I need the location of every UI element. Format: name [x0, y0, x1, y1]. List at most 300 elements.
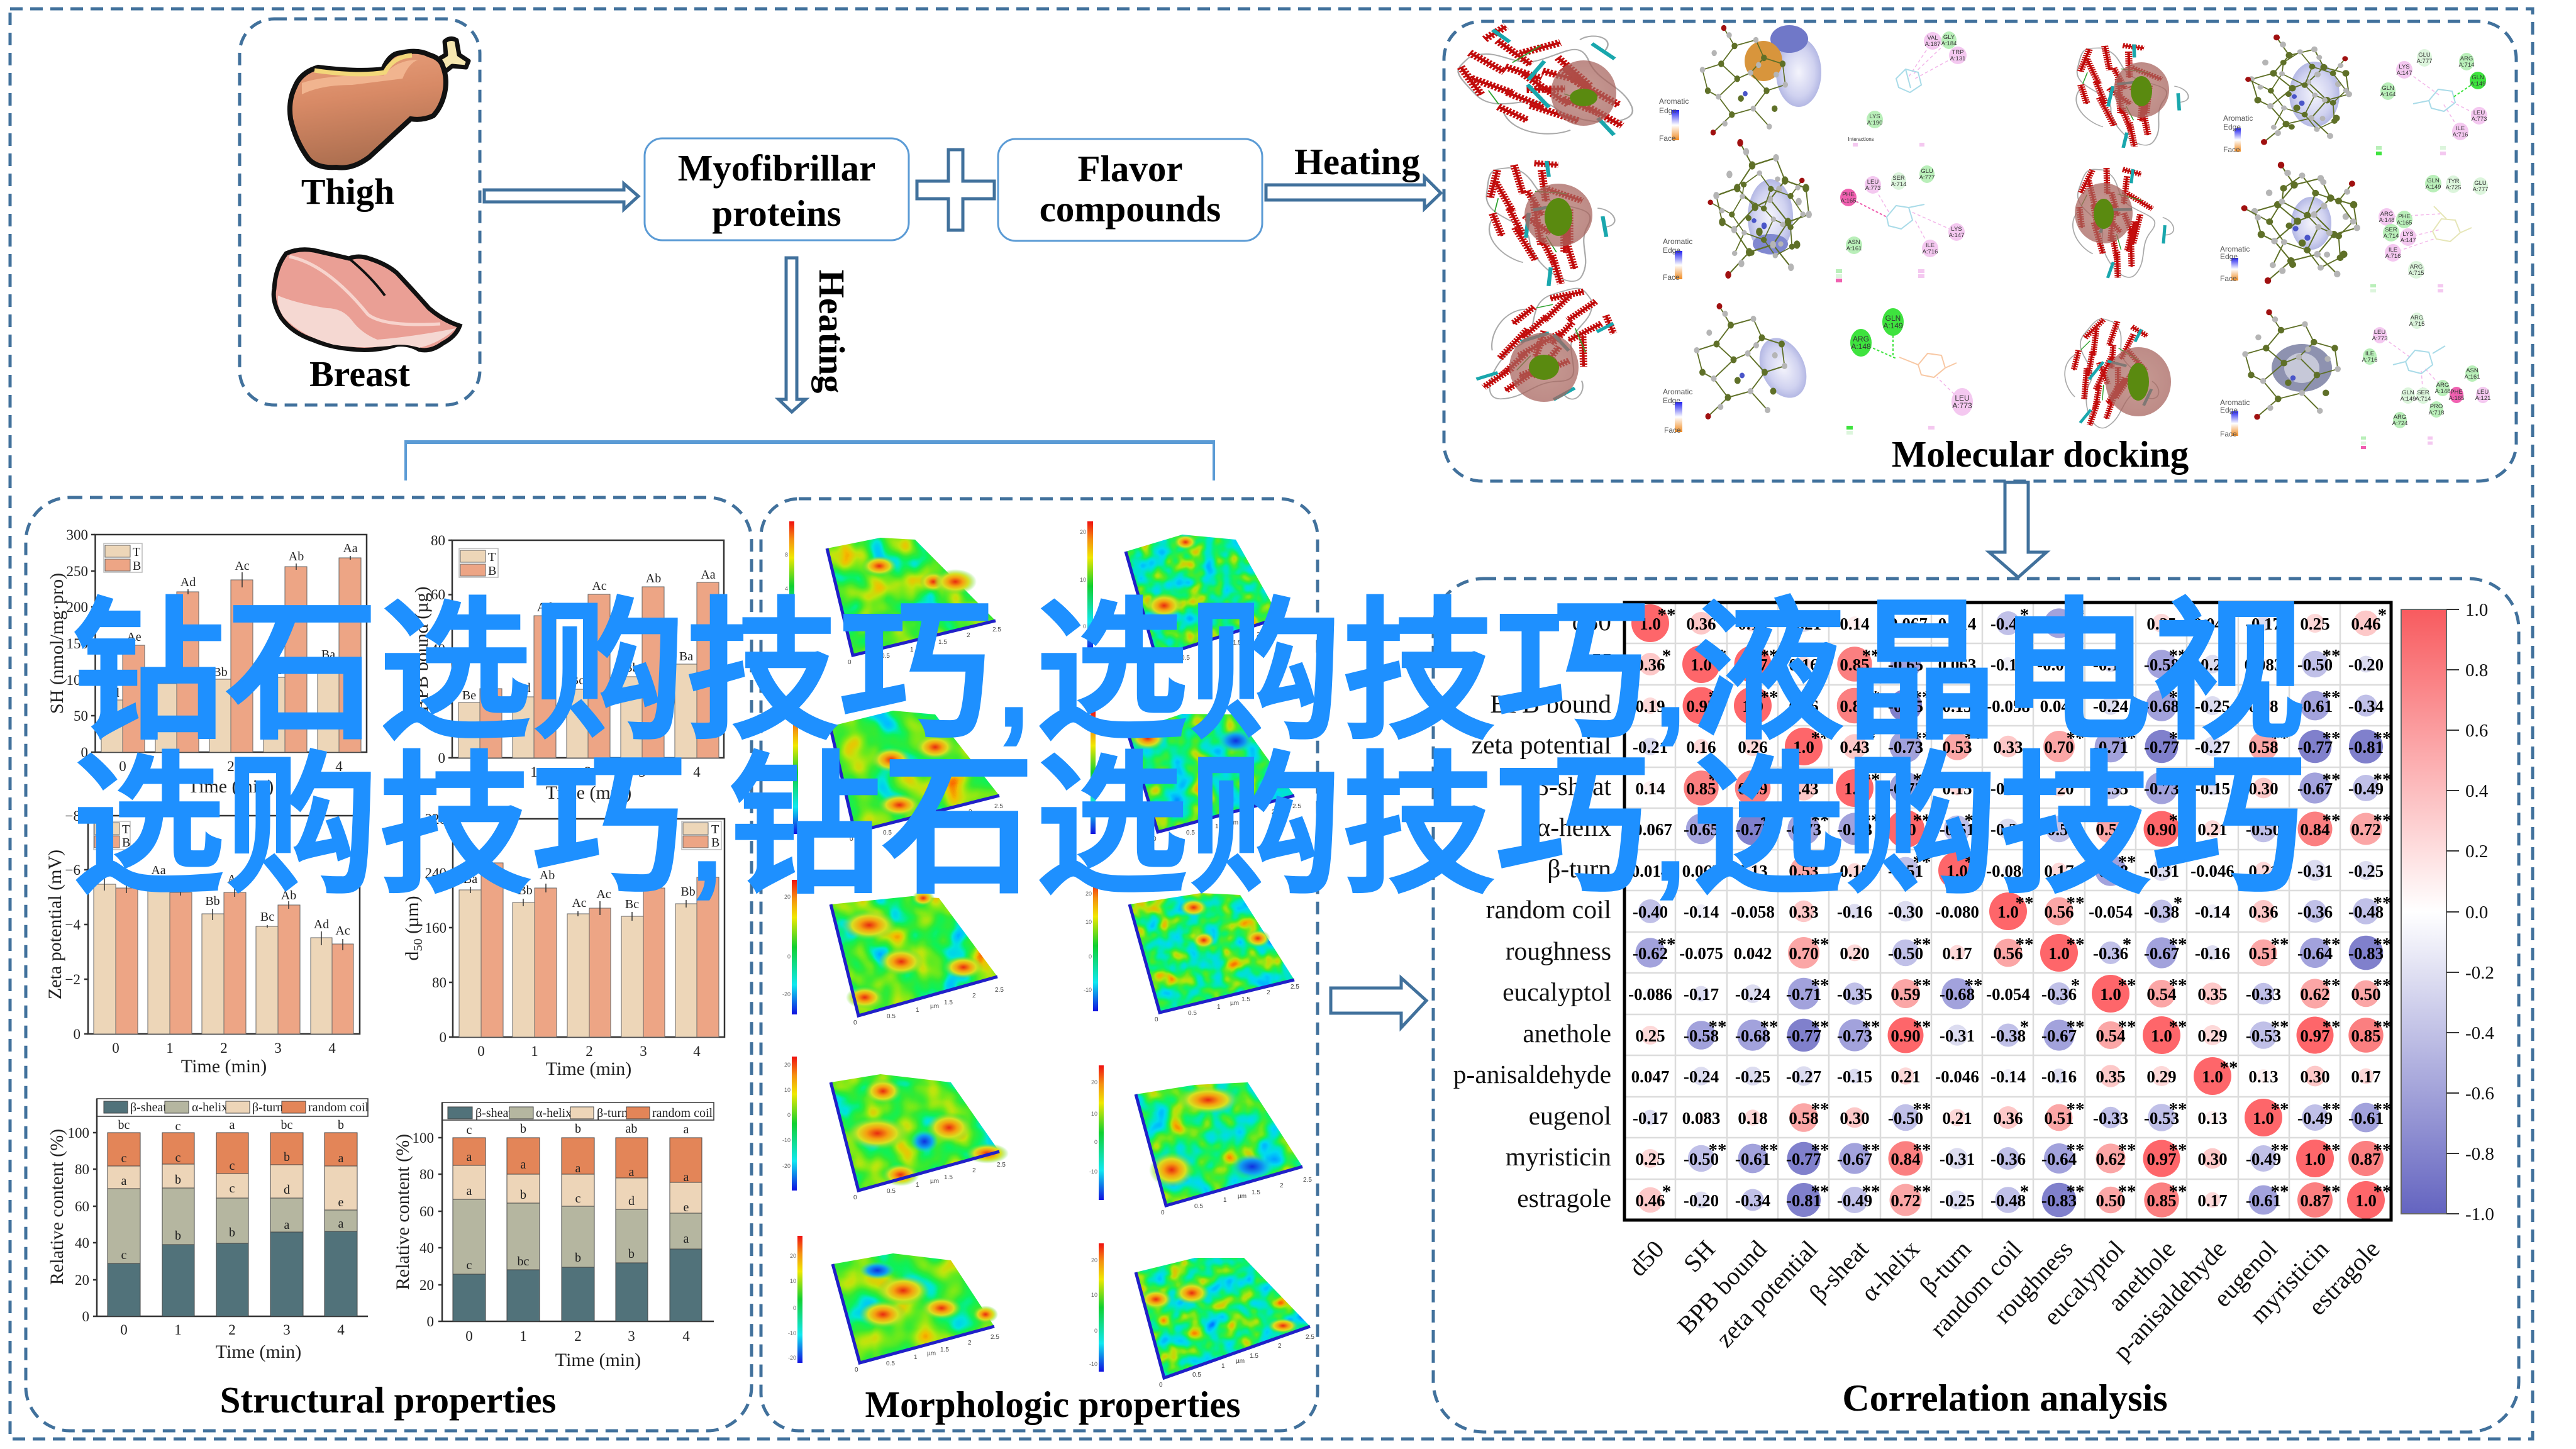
docking row 3 right — [2055, 309, 2490, 449]
chart: relative content stacked bars T: b — [229, 1226, 235, 1240]
row: beta-turn: ** — [1913, 852, 1931, 872]
row: BPB bound: ** — [1862, 687, 1880, 708]
docking row 2 left: A:147 — [1949, 232, 1964, 239]
row: eucalyptol: ** — [2322, 975, 2341, 996]
docking row 3 right: PRO — [2430, 403, 2443, 410]
docking row 1 left: TRP — [1952, 49, 1963, 56]
row: p-anisaldehyde: 0.29 — [2146, 1067, 2177, 1086]
chart: d50 bars: (µm) — [402, 896, 423, 939]
row: eucalyptol: -0.71 — [1786, 985, 1821, 1004]
row: BPB bound: 1.0 — [1742, 697, 1763, 716]
row: SH: ** — [1760, 646, 1779, 666]
row: BPB bound: -0.34 — [2348, 697, 2384, 716]
row: estragole — [1635, 1181, 2391, 1219]
docking row 2 right: Face — [2220, 274, 2237, 283]
chart: d50 bars: Ac — [596, 887, 611, 901]
surface plot 2: 2.5 — [1279, 625, 1287, 631]
chart: zeta potential bars — [45, 808, 360, 1077]
surface plot 6: -10 — [1084, 987, 1092, 993]
row: beta-sheat: -0.35 — [2093, 779, 2128, 798]
docking row 3 left: GLN — [1885, 314, 1901, 323]
box: Flavor compounds: Flavor — [1077, 148, 1183, 189]
row: myristicin: ** — [2118, 1140, 2136, 1160]
chart: d50 bars: 0 — [439, 1030, 447, 1045]
row: myristicin: -0.31 — [1940, 1150, 1975, 1169]
colour scale bar: 0.8 — [2465, 660, 2488, 680]
arrow: docking to correlation — [1989, 482, 2046, 577]
row: myristicin: ** — [2322, 1140, 2341, 1160]
row: d50: ** — [2067, 605, 2084, 625]
row: myristicin: ** — [1862, 1140, 1880, 1160]
heatmap row labels: random coil — [1486, 895, 1611, 924]
surface plot 10: 0 — [1159, 1382, 1163, 1389]
chart: d50 bars: 1 — [531, 1043, 538, 1059]
chart: relative content stacked bars B: β-turn — [597, 1106, 628, 1120]
surface plot 3: 2.5 — [994, 803, 1003, 810]
row: beta-turn: -0.31 — [2297, 862, 2333, 880]
row: random coil — [1633, 892, 2391, 930]
chart: relative content stacked bars T: 1 — [174, 1322, 182, 1338]
row: anethole: ** — [1708, 1017, 1727, 1037]
row: BPB bound: -0.24 — [2093, 697, 2128, 716]
chart: relative content stacked bars T: Relative content (%) — [47, 1129, 67, 1285]
row: anethole: ** — [2322, 1017, 2341, 1037]
chart: BPB bound bars: 80 — [431, 533, 445, 548]
row: myristicin: -0.64 — [2041, 1150, 2077, 1169]
surface plot 8: 2.5 — [1303, 1177, 1312, 1184]
row: anethole — [1635, 1016, 2391, 1054]
row: beta-turn: 0.17 — [2044, 862, 2074, 880]
chart: relative content stacked bars T: 0 — [120, 1322, 128, 1338]
row: zeta potential: -0.81 — [2348, 738, 2384, 757]
chart: BPB bound bars: Time (min) — [546, 782, 631, 803]
heatmap row labels: eucalyptol — [1502, 977, 1611, 1006]
row: zeta potential: * — [1867, 728, 1875, 748]
chart: relative content stacked bars B: b — [575, 1251, 581, 1265]
chart: zeta potential bars: 2 — [220, 1040, 228, 1056]
row: eugenol: 0.30 — [1840, 1109, 1870, 1128]
row: myristicin: ** — [1760, 1140, 1779, 1160]
chart: relative content stacked bars T: 2 — [228, 1322, 236, 1338]
docking row 1 right: A:147 — [2397, 70, 2412, 77]
surface plot 9: 0.5 — [886, 1360, 895, 1367]
row: p-anisaldehyde: -0.27 — [1786, 1067, 1821, 1086]
docking row 3 right: A:773 — [2372, 335, 2387, 342]
row: estragole: ** — [1811, 1182, 1829, 1202]
chart: SH bars: Bc — [159, 670, 173, 684]
row: eugenol: ** — [2322, 1099, 2341, 1119]
chart: d50 bars: Ab — [540, 869, 555, 882]
chart: relative content stacked bars B: Time (min) — [555, 1350, 641, 1370]
row: eugenol: 0.21 — [1942, 1109, 1972, 1128]
row: myristicin: 1.0 — [2304, 1150, 2326, 1169]
row: roughness: ** — [2270, 935, 2289, 955]
row: d50: 0.46 — [2351, 614, 2381, 633]
docking row 2 left: Edge — [1663, 246, 1680, 255]
row: alpha-helix: ** — [2373, 811, 2391, 831]
row: zeta potential: ** — [1965, 728, 1982, 748]
row: eugenol: -0.61 — [2348, 1109, 2384, 1128]
chart: BPB bound bars: Ae — [483, 674, 498, 687]
chart: d50 bars: Bc — [625, 897, 639, 911]
arrow: heating downward: Heating — [811, 270, 852, 393]
heatmap row labels: β-sheat — [1536, 772, 1611, 801]
chart: d50 bars: Aa — [484, 843, 499, 857]
chart: zeta potential bars: −8 — [65, 808, 80, 824]
row: estragole: 0.50 — [2096, 1191, 2126, 1210]
row: anethole: 1.0 — [2151, 1026, 2172, 1045]
chart: relative content stacked bars B: ab — [626, 1122, 637, 1136]
row: zeta potential: -0.77 — [2144, 738, 2179, 757]
chart: SH bars: 0 — [80, 745, 88, 760]
row: eugenol: 0.58 — [1789, 1109, 1819, 1128]
row: random coil: 0.33 — [1789, 902, 1819, 921]
row: estragole: ** — [2373, 1182, 2391, 1202]
row: random coil: -0.30 — [1888, 902, 1923, 921]
row: myristicin: 0.87 — [2351, 1150, 2381, 1169]
row: zeta potential: 0.58 — [2248, 738, 2279, 757]
heatmap column labels: SH — [1678, 1235, 1721, 1278]
docking row 1 right: Face — [2223, 145, 2240, 154]
row: alpha-helix: -0.73 — [1837, 820, 1872, 839]
surface plot 4: 0 — [1153, 836, 1157, 843]
chart: relative content stacked bars B: b — [520, 1188, 526, 1202]
row: beta-turn: -0.51 — [1888, 862, 1923, 880]
row: BPB bound: 0.89 — [1840, 697, 1870, 716]
row: random coil: -0.16 — [1837, 902, 1872, 921]
row: beta-turn: -0.31 — [2144, 862, 2179, 880]
docking row 2 right: A:148 — [2379, 217, 2394, 224]
chart: relative content stacked bars B: a — [629, 1165, 635, 1179]
docking row 3 left: A:149 — [1883, 321, 1903, 330]
surface plot 5: 2 — [972, 992, 976, 999]
surface plot 5: 0.5 — [887, 1013, 896, 1020]
surface plot 8: 10 — [1091, 1111, 1097, 1117]
row: alpha-helix: ** — [2118, 811, 2136, 831]
chart: relative content stacked bars B: e — [684, 1201, 689, 1214]
docking row 3 right: A:718 — [2429, 409, 2444, 416]
arrow: morphology to correlation — [1331, 978, 1426, 1028]
row: zeta potential: ** — [2067, 728, 2084, 748]
row: beta-sheat: ** — [2322, 770, 2341, 790]
heading: Correlation analysis: Correlation analysis — [1842, 1377, 2168, 1419]
row: random coil: -0.48 — [2348, 902, 2384, 921]
box: Myofibrillar proteins — [645, 138, 909, 240]
row: myristicin: -0.50 — [1684, 1150, 1719, 1169]
row: p-anisaldehyde: ** — [2220, 1058, 2238, 1078]
surface plot 7 — [782, 1057, 1009, 1201]
heatmap column labels: p-anisaldehyde — [2107, 1235, 2232, 1365]
chart: BPB bound bars: Ac — [592, 579, 607, 593]
row: eugenol: ** — [2168, 1099, 2187, 1119]
row: BPB bound: 0.18 — [2248, 697, 2279, 716]
surface plot 1: 0 — [848, 659, 852, 666]
chart: relative content stacked bars T: c — [121, 1248, 127, 1262]
colour scale bar: -0.4 — [2465, 1023, 2494, 1043]
docking row 1 right — [2042, 30, 2487, 157]
surface plot 6: 0 — [1155, 1016, 1158, 1023]
row: SH: -0.58 — [2144, 655, 2179, 674]
row: d50: -0.62 — [2041, 614, 2077, 633]
surface plot 1 — [785, 521, 1001, 666]
chart: relative content stacked bars B: a — [684, 1123, 689, 1136]
surface plot 10: 2 — [1278, 1343, 1282, 1350]
row: roughness: ** — [2373, 935, 2391, 955]
row: eucalyptol: -0.68 — [1940, 985, 1975, 1004]
docking row 3 right: Edge — [2220, 406, 2238, 414]
row: anethole: -0.77 — [1786, 1026, 1821, 1045]
chart: relative content stacked bars B: 60 — [419, 1204, 434, 1219]
row: eucalyptol: -0.054 — [1986, 985, 2030, 1004]
surface plot 1: 0.5 — [881, 653, 890, 660]
row: beta-turn: 0.21 — [2248, 862, 2279, 880]
chart: d50 bars — [402, 811, 724, 1079]
row: estragole: 0.85 — [2146, 1191, 2177, 1210]
docking row 2 right — [2046, 152, 2488, 292]
chart: zeta potential bars: Bb — [205, 894, 220, 908]
docking row 2 left: ILE — [1926, 242, 1935, 249]
row: anethole: ** — [1811, 1017, 1829, 1037]
row: d50: -0.40 — [1990, 614, 2026, 633]
box: Myofibrillar proteins: Myofibrillar — [678, 147, 875, 189]
box: Myofibrillar proteins: proteins — [712, 192, 841, 234]
row: anethole: ** — [1760, 1017, 1779, 1037]
row: roughness: ** — [1913, 935, 1931, 955]
row: zeta potential: ** — [2118, 728, 2136, 748]
chart: zeta potential bars: Ad — [314, 918, 329, 931]
chart: SH bars: Bd — [104, 686, 119, 700]
docking row 3 right: ARG — [2436, 382, 2449, 389]
row: estragole: ** — [2168, 1182, 2187, 1202]
chart: relative content stacked bars B: a — [467, 1150, 472, 1164]
heatmap grid — [1624, 602, 2391, 1220]
row: eugenol: -0.17 — [1633, 1109, 1668, 1128]
row: beta-turn: 1.0 — [1946, 862, 1968, 880]
docking row 2 right: GLU — [2474, 180, 2487, 187]
surface plot 7: 10 — [784, 1087, 791, 1093]
surface plot 5 — [782, 880, 1004, 1026]
title overlay — [72, 586, 2306, 912]
row: roughness: 0.042 — [1734, 944, 1772, 963]
row: random coil: -0.14 — [2195, 902, 2230, 921]
surface plot 5: 1.5 — [944, 999, 953, 1006]
row: estragole: -0.34 — [1735, 1191, 1770, 1210]
row: d50: -0.067 — [1884, 614, 1928, 633]
surface plot 10 — [1089, 1243, 1314, 1389]
heatmap column labels: eugenol — [2207, 1235, 2283, 1313]
row: alpha-helix: -0.65 — [1684, 820, 1719, 839]
surface plot 8: 2 — [1280, 1182, 1284, 1189]
row: beta-sheat: -0.15 — [2195, 779, 2230, 798]
row: zeta potential: 0.53 — [1942, 738, 1972, 757]
surface plot 7: 0 — [787, 1112, 791, 1118]
surface plot 8: 0.5 — [1194, 1203, 1203, 1210]
surface plot 3: 0.5 — [883, 830, 892, 836]
row: eucalyptol: -0.086 — [1628, 985, 1672, 1004]
chart: zeta potential bars: Ac — [335, 924, 350, 938]
docking row 3 right: GLN — [2402, 389, 2414, 396]
docking row 3 right: LEU — [2477, 389, 2489, 396]
row: estragole: -0.81 — [1786, 1191, 1821, 1210]
docking row 1 left: A:187 — [1925, 41, 1940, 48]
chart: d50 bars: Ac — [572, 896, 587, 910]
docking row 1 right: GLU — [2418, 52, 2431, 58]
row: eucalyptol: ** — [1965, 975, 1982, 996]
chart: SH bars: B — [133, 559, 141, 573]
row: alpha-helix: -0.50 — [2041, 820, 2077, 839]
row: anethole: ** — [2168, 1017, 2187, 1037]
chart: d50 bars: 240 — [425, 865, 447, 881]
row: BPB bound: ** — [1760, 687, 1779, 708]
surface plot 10: 10 — [1091, 1292, 1097, 1298]
row: myristicin: -0.61 — [1735, 1150, 1770, 1169]
surface plot 5: -20 — [782, 991, 791, 997]
row: alpha-helix: -0.30 — [1990, 820, 2026, 839]
chart: relative content stacked bars T: b — [175, 1173, 181, 1187]
chart: zeta potential bars: 3 — [274, 1040, 282, 1056]
surface plot 5: 0 — [853, 1019, 857, 1026]
surface plot 7: 1 — [916, 1182, 919, 1189]
surface plot 1: 8 — [785, 552, 788, 558]
chart: d50 bars: Aa — [647, 871, 662, 885]
surface plot 8: µm — [1238, 1193, 1246, 1200]
docking row 2 left: A:716 — [1923, 248, 1938, 255]
row: alpha-helix: ** — [1708, 811, 1727, 831]
row: estragole: ** — [2118, 1182, 2136, 1202]
docking row 1 left — [1449, 22, 1967, 147]
row: beta-turn: ** — [2118, 852, 2136, 872]
docking row 2 right: ARG — [2410, 264, 2423, 270]
docking row 3 right: A:121 — [2475, 395, 2490, 402]
chart: BPB bound bars: 0 — [438, 750, 445, 766]
row: estragole: -0.25 — [1940, 1191, 1975, 1210]
row: roughness: -0.50 — [1888, 944, 1923, 963]
chart: zeta potential bars: Ab — [281, 889, 296, 902]
surface plot 9: 1.5 — [940, 1346, 949, 1353]
row: eucalyptol: -0.35 — [1837, 985, 1872, 1004]
row: zeta potential: ** — [1811, 728, 1829, 748]
row: zeta potential: 1.0 — [1793, 738, 1814, 757]
chart: relative content stacked bars B: Relative content (%) — [392, 1134, 413, 1290]
docking row 1 right: A:714 — [2459, 62, 2474, 69]
surface plot 6: 0 — [1089, 953, 1092, 960]
surface plot 7: 0 — [853, 1194, 857, 1201]
chart: SH bars: Ad — [180, 575, 196, 589]
row: SH: -0.24 — [2195, 655, 2230, 674]
chart: d50 bars: Bb — [518, 884, 533, 897]
row: roughness: 0.51 — [2248, 944, 2279, 963]
chart: zeta potential bars: T — [122, 823, 130, 836]
docking row 2 right: PHE — [2398, 213, 2411, 220]
docking row 2 right: A:715 — [2409, 270, 2424, 277]
row: eugenol: -0.33 — [2093, 1109, 2128, 1128]
heatmap row labels: estragole — [1517, 1184, 1611, 1213]
row: SH: ** — [1913, 646, 1931, 666]
row: alpha-helix: ** — [2322, 811, 2341, 831]
docking row 1 right: ILE — [2456, 125, 2465, 132]
row: beta-sheat: ** — [1708, 770, 1727, 790]
row: SH: -0.14 — [1990, 655, 2026, 674]
row: random coil: -0.058 — [1731, 902, 1775, 921]
row: roughness: ** — [1811, 935, 1829, 955]
row: d50: * — [2378, 605, 2387, 625]
row: anethole: -0.68 — [1735, 1026, 1770, 1045]
chart: relative content stacked bars T: β-sheat — [130, 1101, 167, 1114]
row: zeta potential: -0.73 — [1888, 738, 1923, 757]
docking row 2 right: ILE — [2389, 247, 2397, 253]
row: anethole: 0.90 — [1890, 1026, 1921, 1045]
docking row 2 left: Face — [1663, 273, 1680, 282]
chart: SH bars: 300 — [67, 527, 88, 543]
row: random coil: -0.36 — [2297, 902, 2333, 921]
chart: relative content stacked bars T: c — [230, 1159, 235, 1173]
chart: relative content stacked bars B: d — [628, 1194, 635, 1208]
row: d50: -0.086 — [2089, 614, 2133, 633]
docking row 1 right: GLN — [2382, 85, 2394, 92]
row: eucalyptol: 0.54 — [2146, 985, 2177, 1004]
surface plot 8: 0 — [1094, 1139, 1097, 1145]
surface plot 9: 10 — [790, 1278, 796, 1284]
row: roughness: -0.83 — [2348, 944, 2384, 963]
row: roughness: 1.0 — [2048, 944, 2070, 963]
row: SH: ** — [2168, 646, 2187, 666]
row: myristicin: 0.97 — [2146, 1150, 2177, 1169]
docking row 1 right: A:777 — [2417, 58, 2432, 65]
surface plot 8: 1.5 — [1252, 1189, 1260, 1196]
row: eugenol: 0.083 — [1682, 1109, 1720, 1128]
surface plot 6: 1.5 — [1241, 996, 1250, 1003]
surface plot 1: 4 — [785, 586, 788, 592]
chart: relative content stacked bars T: c — [175, 1151, 181, 1165]
row: zeta potential: ** — [2322, 728, 2341, 748]
row: anethole: 0.29 — [2197, 1026, 2228, 1045]
row: random coil: -0.38 — [2144, 902, 2179, 921]
surface plot 4: 1.5 — [1243, 816, 1252, 823]
heatmap row labels: roughness — [1506, 936, 1611, 965]
row: d50: 0.36 — [1686, 614, 1716, 633]
chart: SH bars: 3 — [281, 758, 289, 774]
row: myristicin: 0.25 — [1635, 1150, 1665, 1169]
row: roughness: 0.56 — [1993, 944, 2023, 963]
colour scale bar — [2401, 600, 2494, 1224]
chart: relative content stacked bars B: c — [575, 1192, 581, 1206]
docking row 2 right: SER — [2385, 226, 2397, 233]
row: SH: 0.083 — [2245, 655, 2282, 674]
surface plot 3: 1 — [912, 823, 916, 830]
heatmap column labels: zeta potential — [1710, 1235, 1823, 1353]
heatmap row labels: anethole — [1523, 1019, 1611, 1048]
docking row 2 left: A:165 — [1841, 197, 1856, 204]
row: eugenol: -0.53 — [2144, 1109, 2179, 1128]
chart: zeta potential bars: Aa — [151, 863, 166, 877]
chart: relative content stacked bars B: 0 — [426, 1314, 434, 1330]
row: roughness: -0.075 — [1679, 944, 1723, 963]
docking row 3 left: ARG — [1853, 335, 1869, 343]
row: myristicin: 0.30 — [2197, 1150, 2228, 1169]
row: anethole: * — [2020, 1017, 2029, 1037]
icon: plus sign — [917, 150, 994, 230]
surface plot 5: 0 — [787, 953, 791, 960]
row: p-anisaldehyde: -0.046 — [1935, 1067, 1979, 1086]
surface plot 4: 2 — [1272, 809, 1275, 816]
surface plot 6: 10 — [1085, 919, 1092, 925]
row: d50: 0.19 — [1738, 614, 1768, 633]
row: zeta potential: ** — [2270, 728, 2289, 748]
surface plot 2 — [1080, 521, 1287, 668]
row: estragole: -0.20 — [1684, 1191, 1719, 1210]
row: alpha-helix: ** — [1760, 811, 1779, 831]
docking row 3 left: A:148 — [1851, 342, 1871, 351]
